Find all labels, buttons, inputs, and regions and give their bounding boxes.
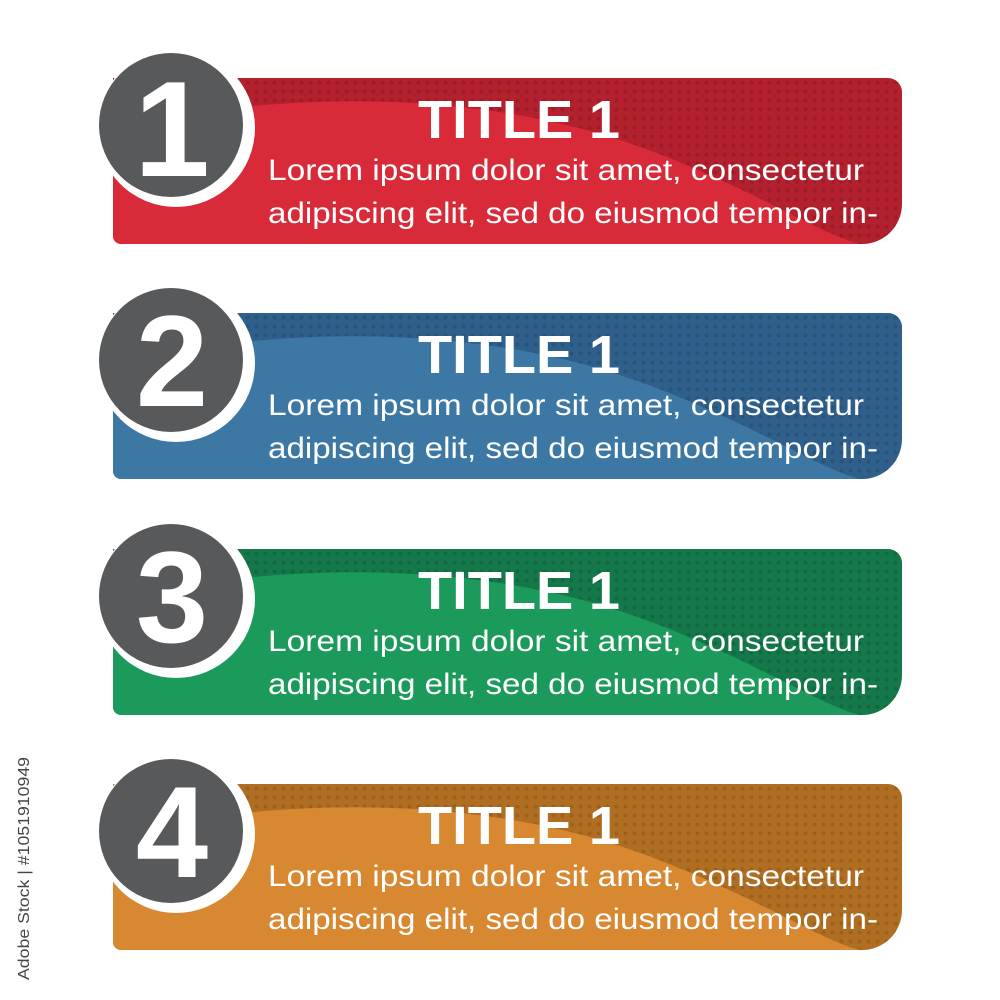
icon: number 1: 1 — [134, 53, 210, 205]
heading: TITLE 1 — [418, 90, 620, 150]
text block — [268, 860, 878, 936]
icon: number 1 — [99, 53, 243, 205]
heading: TITLE 1 — [418, 325, 620, 385]
banner 3 — [97, 520, 902, 715]
text block: adipiscing elit, sed do eiusmod tempor in- — [268, 668, 878, 701]
banner 2 — [97, 284, 902, 479]
text block: adipiscing elit, sed do eiusmod tempor in- — [268, 903, 878, 936]
icon: number 3 — [99, 524, 243, 670]
text block: Lorem ipsum dolor sit amet, consectetur — [268, 625, 864, 658]
icon: number 2: 2 — [136, 288, 208, 434]
text block: Lorem ipsum dolor sit amet, consectetur — [268, 154, 864, 187]
heading: TITLE 1 — [418, 796, 620, 856]
icon: number 4 — [99, 759, 243, 905]
text block — [268, 625, 878, 701]
text block: adipiscing elit, sed do eiusmod tempor in- — [268, 197, 878, 230]
text block: Lorem ipsum dolor sit amet, consectetur — [268, 389, 864, 422]
text block: adipiscing elit, sed do eiusmod tempor in- — [268, 432, 878, 465]
icon: number 2 — [99, 288, 243, 434]
banner 4 — [97, 755, 902, 950]
icon: number 3: 3 — [136, 524, 208, 670]
watermark caption: Adobe Stock | #1051910949 — [16, 757, 33, 980]
banner 1 — [97, 49, 902, 244]
text block — [268, 154, 878, 230]
icon: number 4: 4 — [136, 759, 208, 905]
text block: Lorem ipsum dolor sit amet, consectetur — [268, 860, 864, 893]
text block — [268, 389, 878, 465]
heading: TITLE 1 — [418, 561, 620, 621]
